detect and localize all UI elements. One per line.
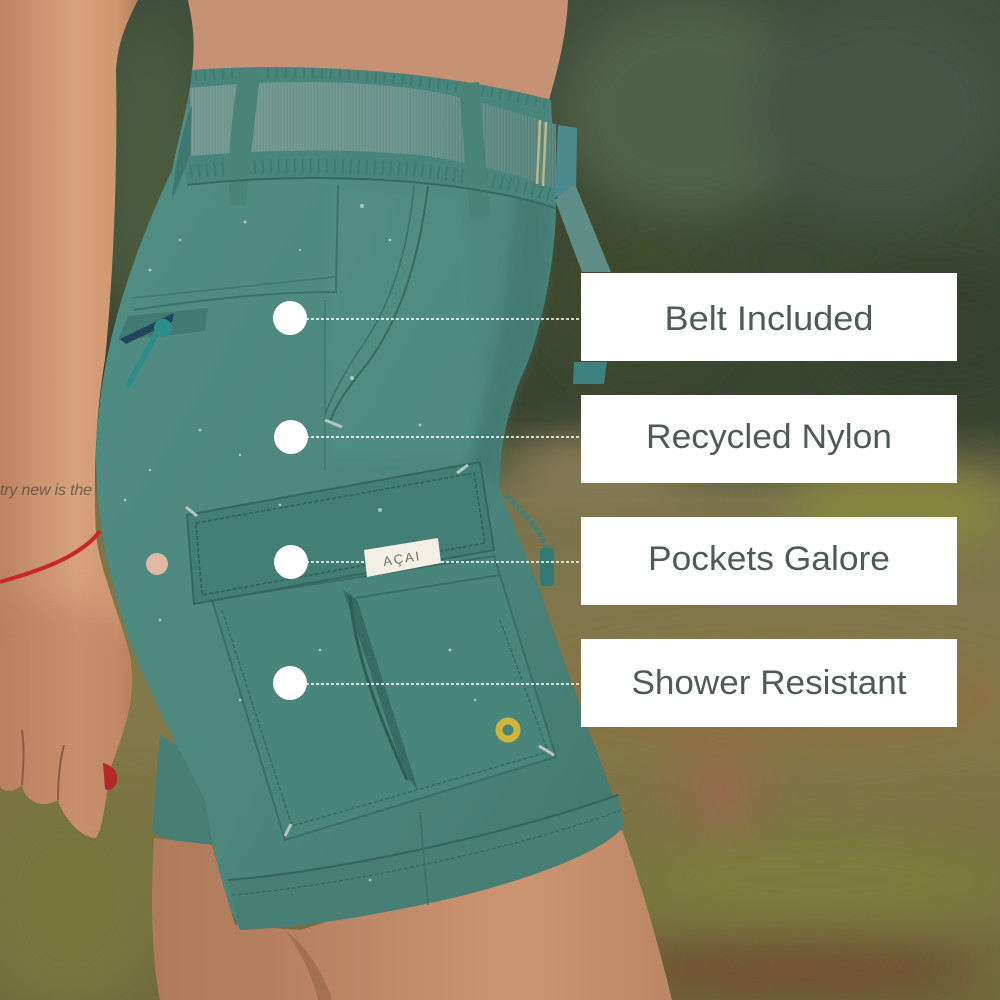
belt loops [229, 68, 261, 205]
belt buckle [555, 125, 577, 200]
torso skin [188, 0, 568, 100]
callout: Belt Included: Belt Included [664, 300, 874, 338]
rear rivet [146, 553, 168, 575]
water droplets [124, 204, 476, 881]
zipper pocket [118, 308, 208, 340]
rear leg shorts [152, 735, 213, 844]
bartacks [186, 420, 554, 836]
elastic waistband [185, 67, 555, 208]
arm and hand [0, 0, 138, 838]
callout: Recycled Nylon [274, 395, 957, 483]
shorts body [96, 67, 624, 930]
brand tag [364, 538, 441, 577]
callout: Recycled Nylon: Recycled Nylon [646, 418, 892, 456]
shorts [96, 67, 624, 930]
callout: Shower Resistant: Shower Resistant [632, 664, 907, 702]
nail [103, 763, 117, 790]
cord and toggle [506, 496, 546, 548]
cargo pocket body [212, 556, 556, 840]
hand shading and finger creases [20, 599, 124, 838]
yellow eyelet [499, 721, 517, 739]
callout: Pockets Galore [274, 517, 957, 605]
callout: Belt Included [273, 273, 957, 361]
red bracelet [0, 531, 100, 582]
callout: Pockets Galore: Pockets Galore [648, 540, 890, 578]
belt tail [555, 184, 611, 272]
legs [152, 830, 672, 1000]
side pocket seam [330, 186, 428, 422]
hem [228, 795, 624, 930]
callout: Shower Resistant [273, 639, 957, 727]
zipper pull [128, 335, 156, 385]
waist seam [187, 178, 555, 208]
belt [190, 82, 556, 188]
pocket flap [187, 462, 494, 604]
shading along back edge [470, 190, 551, 490]
cargo pocket pleat [343, 590, 418, 790]
brand tag: AÇAI [382, 548, 422, 569]
waistband gathers [190, 166, 553, 196]
tattoo: try new is the [0, 482, 92, 499]
